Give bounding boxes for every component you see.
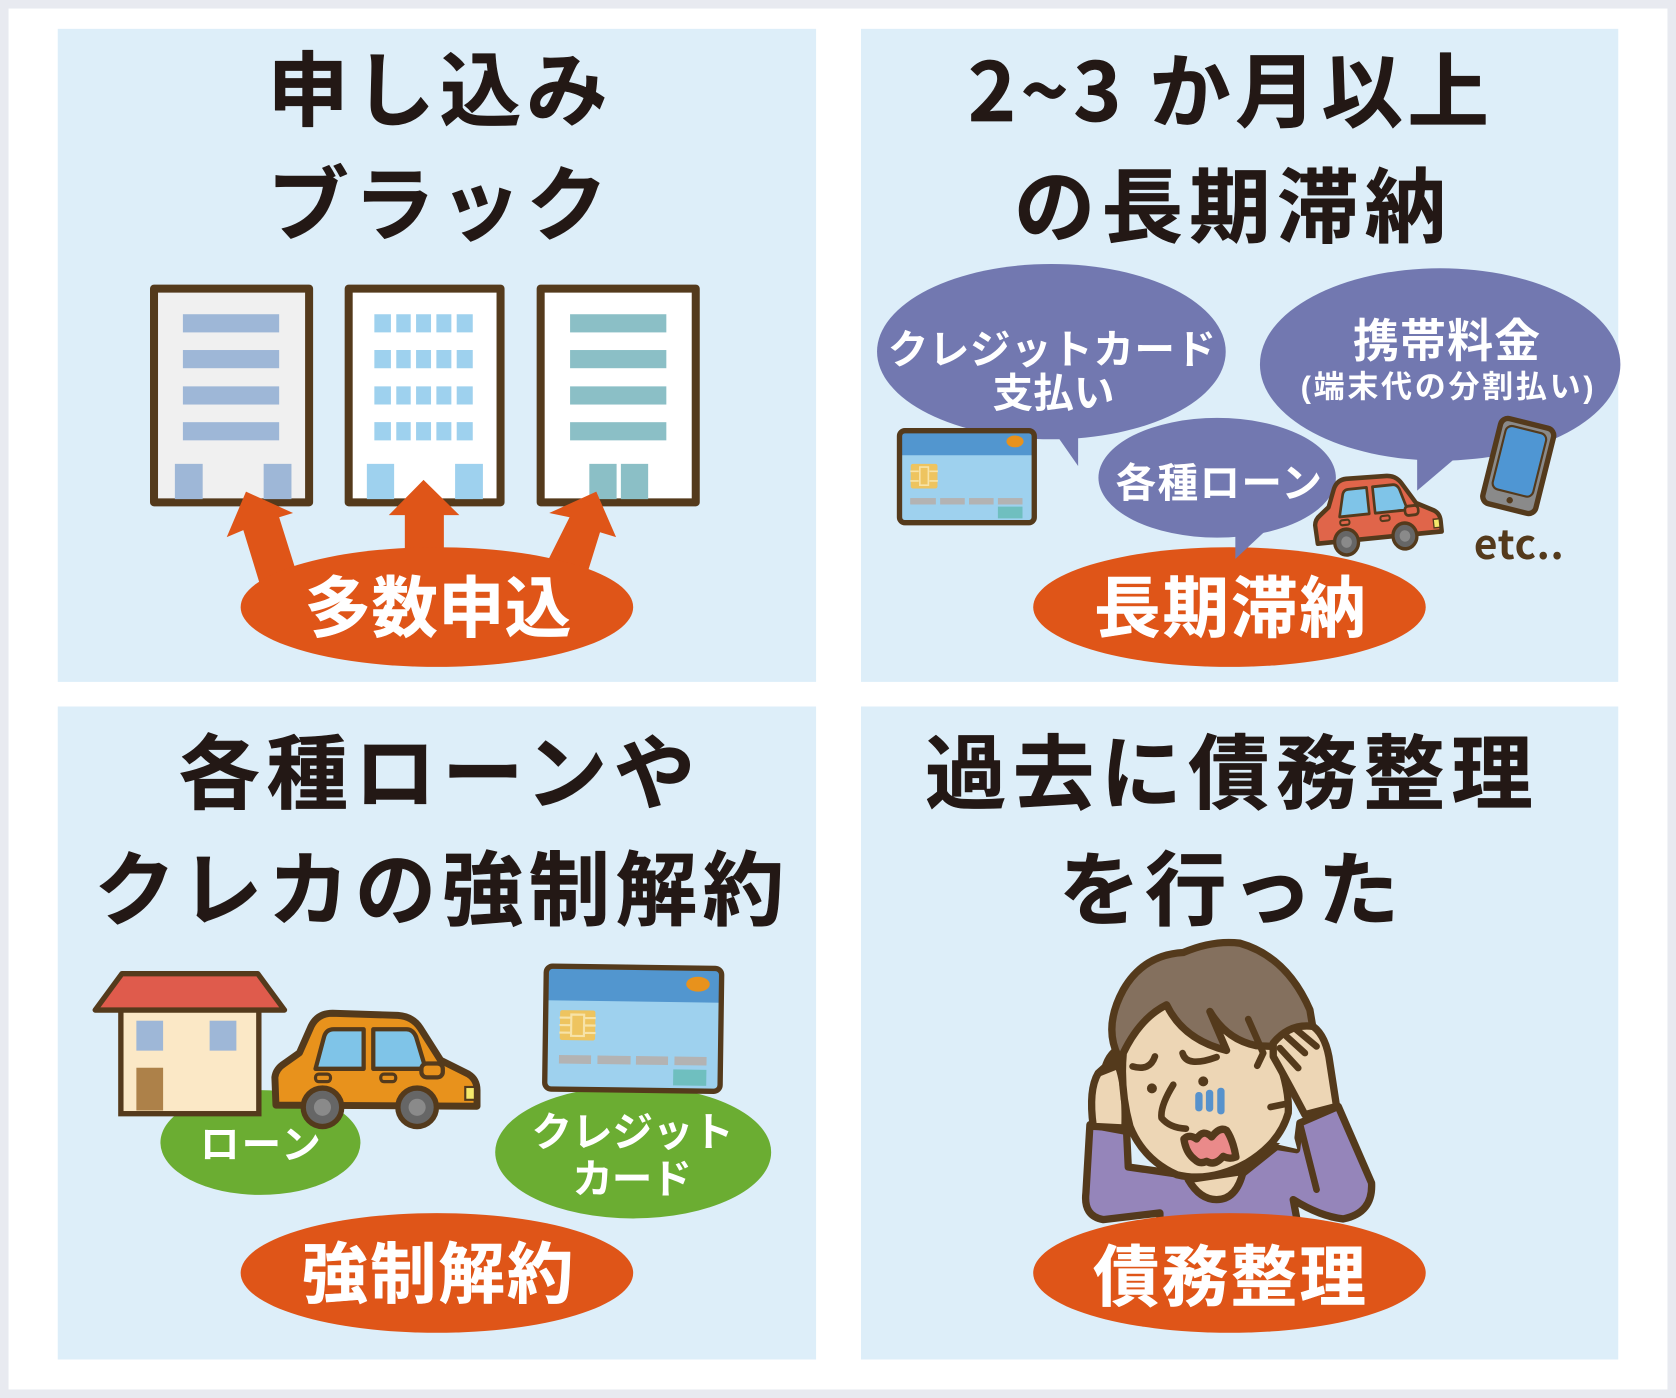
callout: many applications — [241, 547, 633, 667]
callout: many applications: 多数申込 — [305, 573, 571, 647]
speech bubble: credit card payments: 支払い — [993, 370, 1114, 416]
label: etc: etc.. — [1474, 512, 1564, 571]
icon: credit card large — [545, 966, 722, 1091]
icon: smartphone — [1481, 417, 1555, 515]
heading: application blacklist: ブラック — [267, 161, 608, 252]
callout: forced cancellation — [241, 1213, 633, 1333]
heading: long-term delinquency — [968, 28, 1489, 254]
speech bubble: credit card payments: クレジットカード — [888, 326, 1216, 372]
panel: application blacklist — [58, 29, 816, 682]
label: credit card: クレジット — [532, 1109, 734, 1155]
label: credit card — [495, 1086, 771, 1218]
callout: debt settlement: 債務整理 — [1093, 1242, 1366, 1316]
speech bubble: credit card payments — [877, 264, 1226, 466]
icon: house — [95, 974, 285, 1114]
callout: debt settlement — [1033, 1213, 1426, 1333]
mouth — [1184, 1129, 1236, 1163]
icon: orange car — [275, 1013, 477, 1127]
panel: forced cancellation — [58, 706, 816, 1360]
label: loan — [160, 1090, 360, 1195]
arrow: centre — [389, 480, 459, 561]
icon: worried person — [1086, 942, 1372, 1226]
callout: forced cancellation: 強制解約 — [302, 1239, 573, 1313]
heading: past debt settlement: 過去に債務整理 — [925, 730, 1533, 821]
label: loan: ローン — [200, 1124, 321, 1168]
heading: long-term delinquency: 2~3 か月以上 — [968, 28, 1489, 145]
icon: office building 1 — [154, 289, 309, 502]
speech bubble: mobile charges: 携帯料金 — [1353, 315, 1540, 367]
label: credit card: カード — [572, 1156, 692, 1202]
heading: forced cancellation: 各種ローンや — [179, 730, 695, 821]
heading: past debt settlement — [925, 730, 1533, 937]
callout: long-term delinquency: 長期滞納 — [1094, 573, 1366, 647]
callout: long-term delinquency — [1033, 547, 1426, 667]
arrow: left — [227, 492, 296, 588]
icon: office building 2 — [349, 289, 501, 502]
heading: forced cancellation: クレカの強制解約 — [94, 846, 784, 937]
icon: credit card small — [899, 431, 1034, 523]
heading: application blacklist: 申し込み — [267, 47, 608, 138]
icon: red car — [1311, 469, 1443, 558]
heading: forced cancellation — [94, 730, 784, 937]
heading: application blacklist — [267, 47, 608, 252]
speech bubble: various loans — [1098, 418, 1336, 559]
icon: office building 3 — [541, 289, 696, 502]
arrow: right — [548, 492, 616, 577]
speech bubble: various loans: 各種ローン — [1116, 460, 1322, 506]
heading: past debt settlement: を行った — [1059, 846, 1399, 937]
panel: past debt settlement — [861, 706, 1618, 1360]
speech bubble: mobile charges: (端末代の分割払い) — [1301, 370, 1594, 405]
panel: long-term delinquency — [861, 28, 1620, 682]
heading: long-term delinquency: の長期滞納 — [1014, 163, 1446, 254]
speech bubble: mobile charges — [1260, 268, 1620, 491]
